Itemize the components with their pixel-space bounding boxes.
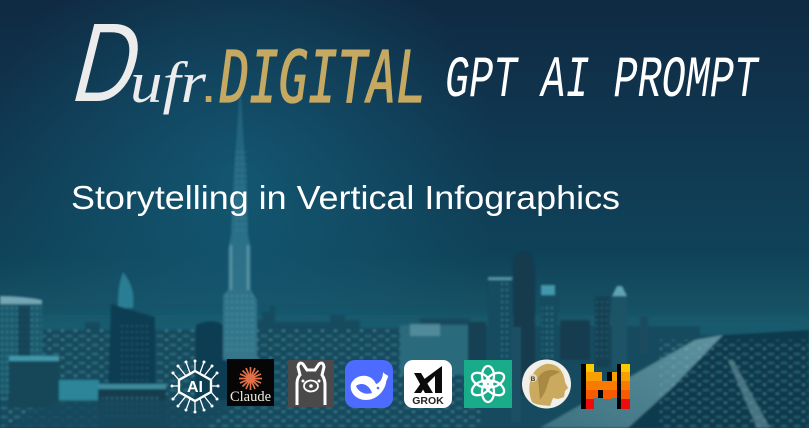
heading: Storytelling in Vertical Infographics (71, 180, 620, 217)
illustration: Dubai skyline (0, 92, 809, 428)
icon: Claude (227, 359, 274, 406)
icon: AI chip: AI (187, 379, 203, 396)
icon: ChatGPT (464, 360, 512, 408)
wordmark: dot: . (203, 67, 214, 111)
title (62, 0, 760, 125)
icon: Claude: Claude (230, 389, 271, 405)
wordmark: Dufr: ufr (130, 50, 206, 115)
icon: golden head portrait: B (531, 376, 536, 383)
wordmark: Dufr: D (62, 0, 155, 125)
wordmark: Dufr (62, 0, 206, 125)
icon: golden head portrait (522, 360, 571, 408)
icon: AI chip (170, 360, 220, 414)
icon: Ollama (288, 360, 334, 407)
icon: Mistral (581, 364, 630, 409)
icon: DeepSeek (345, 360, 393, 408)
icon: Grok (404, 360, 452, 408)
wordmark: DIGITAL: DIGITAL (219, 36, 426, 119)
icon: Grok: GROK (412, 395, 444, 407)
